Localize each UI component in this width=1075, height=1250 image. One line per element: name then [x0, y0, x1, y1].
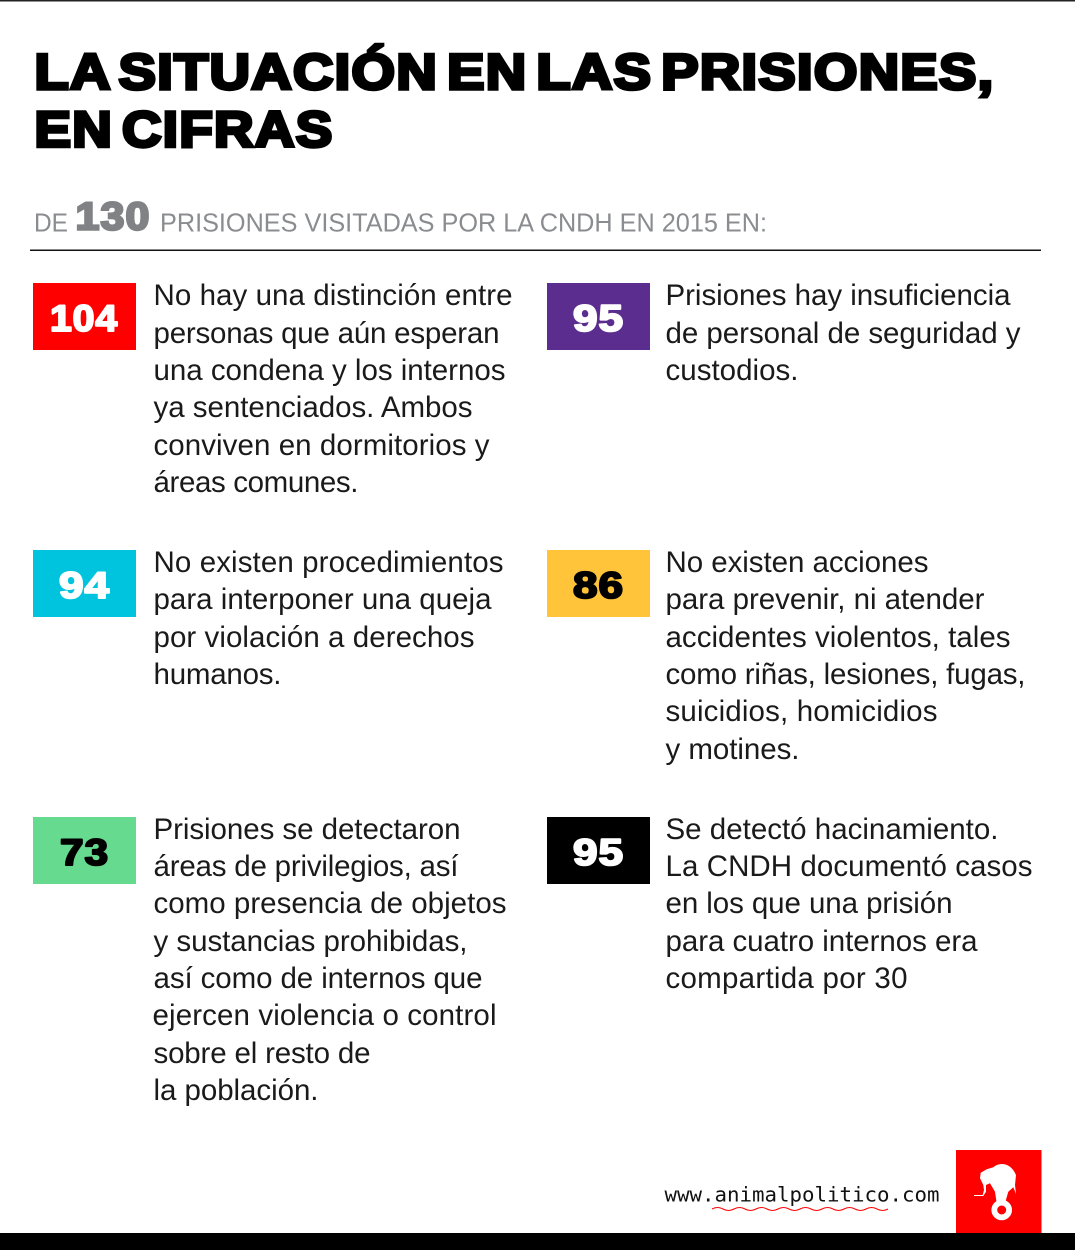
- text: 94: [154, 546, 504, 691]
- text: 73: áreas de privilegios, así: [154, 850, 459, 883]
- text: 86: y motines.: [666, 733, 800, 766]
- text: 73: sobre el resto de: [154, 1037, 370, 1070]
- website url: www.animalpolitico.com: [664, 1182, 940, 1206]
- text: 94: por violación a derechos: [154, 621, 474, 654]
- text: 86: suicidios, homicidios: [666, 695, 938, 728]
- panel: 73: [33, 813, 506, 1107]
- panel: 104: [33, 279, 512, 499]
- subtitle: PRISIONES VISITADAS POR LA CNDH EN 2015 EN:: [160, 210, 767, 238]
- badge: 95 black: 95: [573, 832, 624, 873]
- panel: 86: [547, 546, 1026, 766]
- badge: 95 purple: 95: [573, 298, 624, 339]
- text: 73: como presencia de objetos: [154, 887, 506, 920]
- text: 73: ejercen violencia o control: [152, 999, 496, 1032]
- text: 104: ya sentenciados. Ambos: [154, 391, 472, 424]
- text: 95 hacinamiento: Se detectó hacinamiento.: [666, 813, 998, 846]
- text: 95 hacinamiento: compartida por 30: [666, 962, 908, 995]
- text: 73: y sustancias prohibidas,: [154, 925, 468, 958]
- text: 95 personal: custodios.: [666, 354, 798, 387]
- logo: elephant: [956, 1150, 1042, 1234]
- text: 104: una condena y los internos: [154, 354, 506, 387]
- subtitle: DE: [34, 210, 68, 238]
- title: LA SITUACIÓN EN LAS PRISIONES,: [34, 44, 994, 100]
- text: 95 personal: de personal de seguridad y: [666, 317, 1021, 350]
- text: 86: como riñas, lesiones, fugas,: [666, 658, 1026, 691]
- panel: 95 personal: [547, 279, 1021, 387]
- text: 94: No existen procedimientos: [154, 546, 504, 579]
- badge: 73: 73: [60, 832, 109, 873]
- title: EN CIFRAS: [34, 102, 334, 158]
- badge: 94: 94: [59, 565, 110, 606]
- badge: 86: [547, 550, 650, 617]
- panel: 94: [33, 546, 504, 691]
- panel: 95 hacinamiento: [547, 813, 1032, 995]
- badge: 104: [33, 283, 136, 350]
- text: 86: para prevenir, ni atender: [666, 583, 985, 616]
- title: [34, 44, 994, 158]
- text: 86: accidentes violentos, tales: [666, 621, 1010, 654]
- text: 73: así como de internos que: [154, 962, 482, 995]
- badge: 104: 104: [50, 298, 118, 339]
- text: 94: para interponer una queja: [154, 583, 492, 616]
- text: 104: personas que aún esperan: [154, 317, 500, 350]
- text: 95 hacinamiento: para cuatro internos era: [666, 925, 978, 958]
- text: 95 personal: [666, 279, 1021, 387]
- badge: 94: [33, 550, 136, 617]
- text: 104: conviven en dormitorios y: [154, 429, 490, 462]
- text: 94: humanos.: [154, 658, 282, 691]
- badge: 95 black: [547, 817, 650, 884]
- badge: 73: [33, 817, 136, 884]
- footer bar: [0, 1233, 1075, 1250]
- text: 95 hacinamiento: en los que una prisión: [666, 887, 952, 920]
- text: 104: [154, 279, 512, 499]
- text: 95 hacinamiento: La CNDH documentó casos: [666, 850, 1032, 883]
- subtitle: [34, 196, 767, 238]
- text: 95 personal: Prisiones hay insuficiencia: [666, 279, 1011, 312]
- badge: 86: 86: [573, 565, 624, 606]
- text: 73: [152, 813, 506, 1107]
- text: 104: áreas comunes.: [154, 466, 358, 499]
- text: 73: Prisiones se detectaron: [154, 813, 460, 846]
- subtitle: 130: [76, 196, 150, 238]
- text: 73: la población.: [154, 1074, 318, 1107]
- text: 86: No existen acciones: [666, 546, 928, 579]
- text: 95 hacinamiento: [666, 813, 1032, 995]
- text: 104: No hay una distinción entre: [154, 279, 512, 312]
- badge: 95 purple: [547, 283, 650, 350]
- text: 86: [666, 546, 1026, 766]
